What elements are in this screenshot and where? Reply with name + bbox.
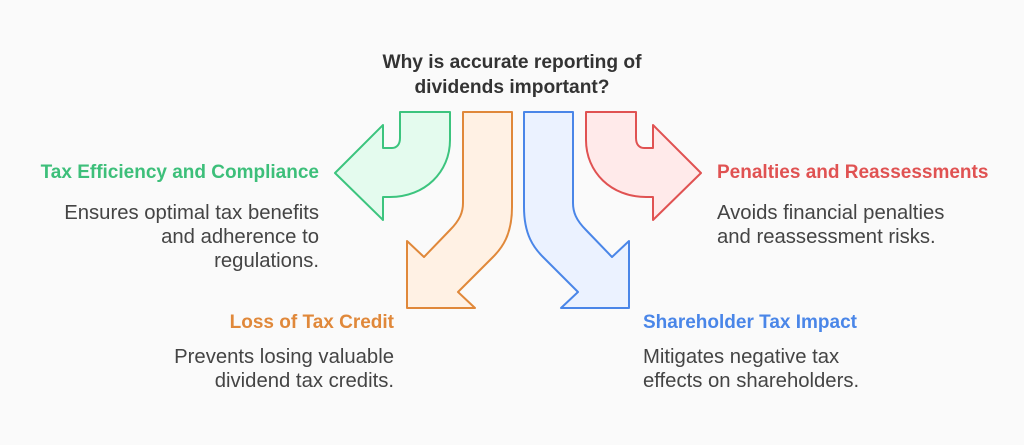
text: penalties [717,202,944,248]
text: shareholder: effects on shareholders. [643,370,859,392]
text: loss of tax credit [174,346,394,392]
text: tax efficiency [64,202,319,272]
title: Why is accurate reporting of [382,52,642,73]
arrow: orange [407,112,512,308]
heading: tax efficiency: Tax Efficiency and Compliance [41,162,319,183]
title: dividends important? [414,77,610,98]
text: tax efficiency: and adherence to [161,226,319,248]
title [382,52,642,98]
heading: loss of tax credit: Loss of Tax Credit [230,312,394,333]
text: tax efficiency: regulations. [214,250,319,272]
text: shareholder [643,346,859,392]
text: loss of tax credit: Prevents losing valuable [174,346,394,368]
text: shareholder: Mitigates negative tax [643,346,839,368]
text: penalties: and reassessment risks. [717,226,936,248]
heading: shareholder: Shareholder Tax Impact [643,312,857,333]
arrow: green [335,112,450,220]
text: tax efficiency: Ensures optimal tax benefits [64,202,319,224]
text: penalties: Avoids financial penalties [717,202,944,224]
arrow: blue [524,112,629,308]
text: loss of tax credit: dividend tax credits. [215,370,394,392]
arrow: red [586,112,701,220]
heading: penalties: Penalties and Reassessments [717,162,988,183]
